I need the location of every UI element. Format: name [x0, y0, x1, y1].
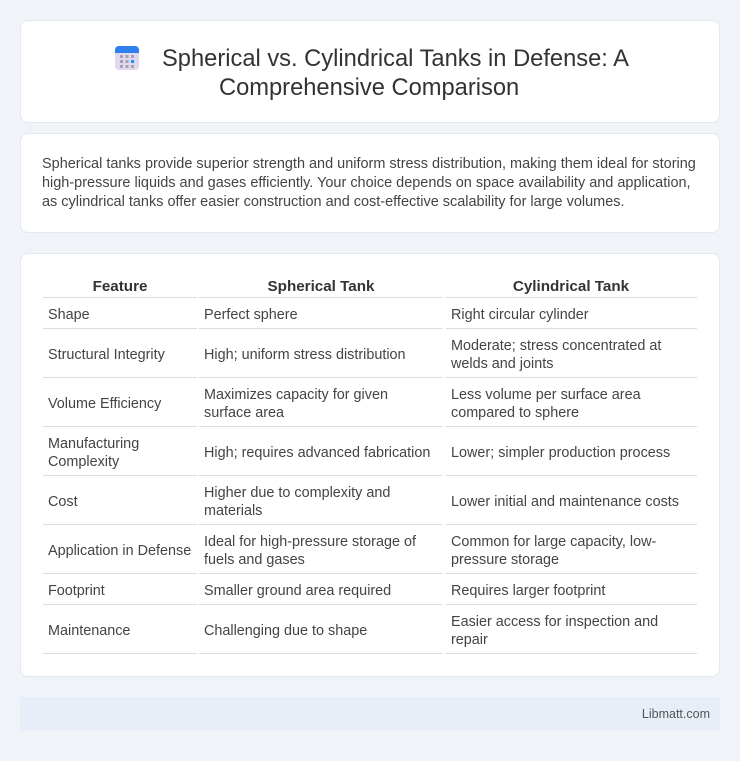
row: Structural Integrity: Moderate; stress concentrated at	[451, 338, 661, 354]
row: Volume Efficiency	[48, 387, 641, 421]
row: Maintenance: repair	[451, 632, 488, 648]
row: Structural Integrity: High; uniform stress distribution	[204, 347, 406, 363]
panel: header	[20, 20, 720, 123]
row: Shape: Perfect sphere	[204, 307, 298, 323]
title: Comprehensive Comparison	[219, 75, 519, 101]
row: Cost: Lower initial and maintenance costs	[451, 494, 679, 510]
row: Application in Defense: Common for large capacity, low-	[451, 534, 656, 550]
row: Shape	[48, 307, 589, 323]
row: Volume Efficiency: surface area	[204, 405, 284, 421]
text block: intro paragraph: Spherical tanks provide superior strength and uniform stress distribution, making them ideal for storing	[42, 156, 696, 172]
footer bar	[20, 697, 720, 731]
row: Structural Integrity: Structural Integrity	[48, 347, 165, 363]
row: Manufacturing Complexity	[48, 436, 670, 470]
row: Footprint	[48, 583, 606, 599]
row: Shape: Right circular cylinder	[451, 307, 589, 323]
row: Application in Defense: fuels and gases	[204, 552, 305, 568]
table header: Feature: Feature	[93, 278, 147, 295]
panel: comparison table	[20, 253, 720, 677]
row: Maintenance	[48, 614, 658, 648]
row: Manufacturing Complexity: High; requires advanced fabrication	[204, 445, 430, 461]
row: Manufacturing Complexity: Manufacturing	[48, 436, 139, 452]
row: Footprint: Smaller ground area required	[204, 583, 391, 599]
row: Application in Defense	[48, 534, 656, 568]
row: Manufacturing Complexity: Complexity	[48, 454, 119, 470]
row: Maintenance: Easier access for inspection and	[451, 614, 658, 630]
row: Application in Defense: Ideal for high-pressure storage of	[204, 534, 416, 550]
row: Volume Efficiency: Maximizes capacity for given	[204, 387, 388, 403]
row: Structural Integrity: welds and joints	[451, 356, 553, 372]
row: Application in Defense: pressure storage	[451, 552, 559, 568]
row: Cost	[48, 485, 679, 519]
row: Cost: Higher due to complexity and	[204, 485, 390, 501]
row: Maintenance: Maintenance	[48, 623, 130, 639]
row: Manufacturing Complexity: Lower; simpler production process	[451, 445, 670, 461]
text block: intro paragraph	[42, 156, 696, 210]
row: Volume Efficiency: compared to sphere	[451, 405, 579, 421]
row: Footprint: Footprint	[48, 583, 105, 599]
panel: intro	[20, 133, 720, 233]
row: Shape: Shape	[48, 307, 90, 323]
row: Application in Defense: Application in Defense	[48, 543, 191, 559]
table header: Spherical Tank: Spherical Tank	[268, 278, 374, 295]
title	[162, 46, 629, 101]
text block: intro paragraph: high-pressure liquids and gases efficiently. Your choice depends on space availability and application,	[42, 175, 691, 191]
row: Cost: Cost	[48, 494, 78, 510]
text block: intro paragraph: as cylindrical tanks offer easier construction and cost-effective scalability for large volumes.	[42, 194, 625, 210]
row: Cost: materials	[204, 503, 262, 519]
row: Volume Efficiency: Volume Efficiency	[48, 396, 161, 412]
row: Maintenance: Challenging due to shape	[204, 623, 367, 639]
row: Volume Efficiency: Less volume per surface area	[451, 387, 641, 403]
title: Spherical vs. Cylindrical Tanks in Defense: A	[162, 46, 629, 72]
footer text: Libmatt.com	[642, 707, 710, 721]
row: Footprint: Requires larger footprint	[451, 583, 605, 599]
table header: Cylindrical Tank: Cylindrical Tank	[513, 278, 629, 295]
icon: calendar grid	[115, 46, 139, 70]
row: Structural Integrity	[48, 338, 662, 372]
